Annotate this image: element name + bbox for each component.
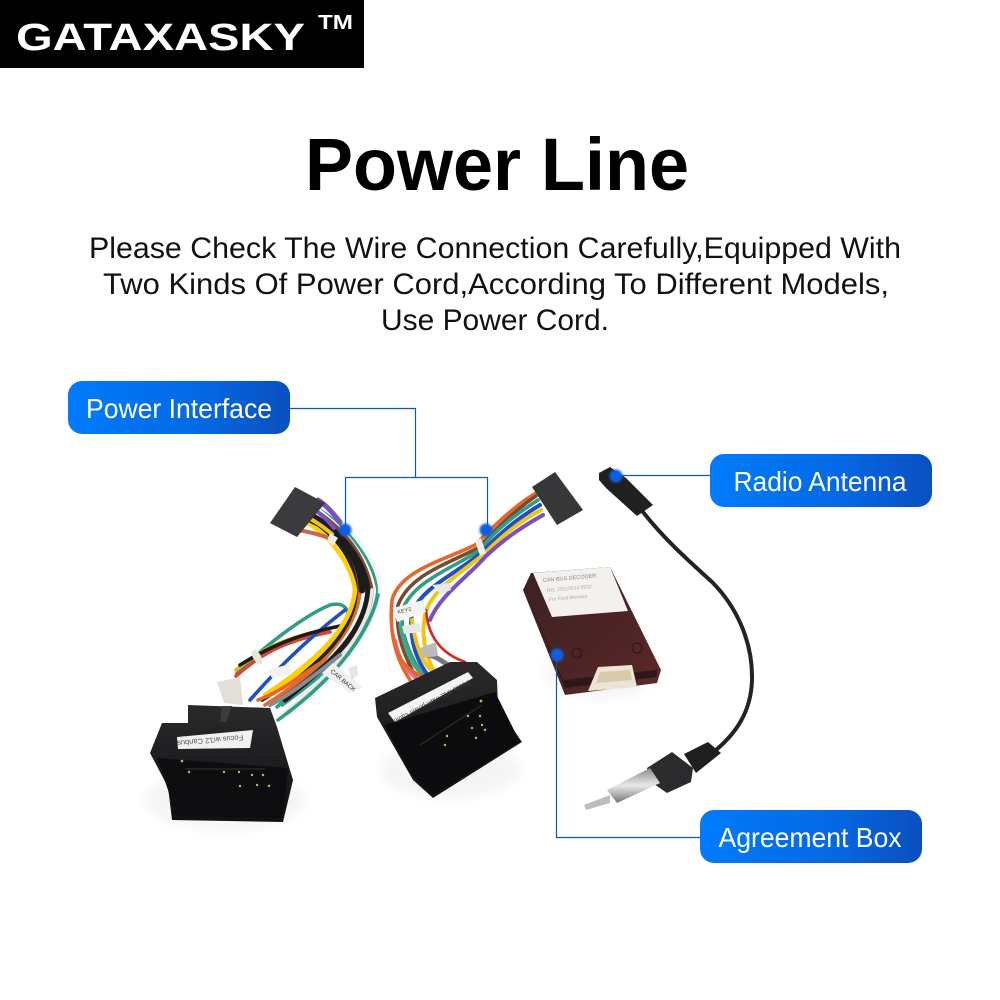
label: Power Interface: Power Interface [86, 393, 272, 424]
top-right small black connector [532, 472, 583, 525]
pins [181, 760, 270, 787]
description text: Two Kinds Of Power Cord,According To Different Models, [103, 268, 889, 301]
description text [89, 232, 901, 337]
logo: GATAXASKY brand block [0, 0, 364, 68]
right harness wires [391, 492, 543, 685]
big left connector: Focus w/12 Canbus [177, 733, 244, 748]
label: Agreement Box: Agreement Box [718, 822, 902, 853]
logo: GATAXASKY brand block: GATAXASKY [16, 17, 305, 59]
wire tag: KEY2 [393, 600, 426, 622]
box label: NO. 20210514 0932 [547, 584, 592, 594]
marker dots [338, 470, 622, 662]
description text: Use Power Cord. [381, 304, 609, 337]
label: Radio Antenna [710, 454, 932, 507]
big left connector [150, 705, 293, 822]
label: Power Interface [68, 381, 290, 434]
label: Agreement Box [700, 810, 922, 863]
right cable tie [475, 538, 486, 556]
left wire tie [250, 648, 264, 666]
product photo: radio antenna cable [584, 467, 752, 810]
wire tag: KEY2: KEY2 [397, 607, 412, 616]
description text: Please Check The Wire Connection Carefully,Equipped With [89, 232, 901, 265]
box white connector [588, 665, 637, 691]
white tag [268, 664, 292, 678]
title: Power Line [305, 123, 689, 206]
small white plug [217, 677, 243, 705]
product photo: agreement box module [523, 567, 661, 700]
box label: CAN BUS DECODER [543, 573, 596, 584]
product photo: right wiring harness [375, 472, 583, 798]
top-left small black connector [270, 487, 325, 537]
left cable tie [327, 533, 338, 546]
wire tags [432, 583, 451, 594]
white tag: CAR BACK [322, 663, 363, 693]
label: Radio Antenna: Radio Antenna [734, 466, 907, 497]
connector lines [290, 408, 710, 838]
left harness wires [236, 500, 380, 720]
product photo: left wiring harness [145, 487, 380, 830]
big right connector: Focus 8/11 main power cable [392, 678, 470, 724]
logo: GATAXASKY brand block: TM [318, 12, 353, 34]
box label: For Ford Mondeo [549, 594, 588, 603]
big right connector [375, 662, 522, 798]
box label [533, 567, 628, 617]
white tag: CAR BACK: CAR BACK [329, 669, 356, 693]
